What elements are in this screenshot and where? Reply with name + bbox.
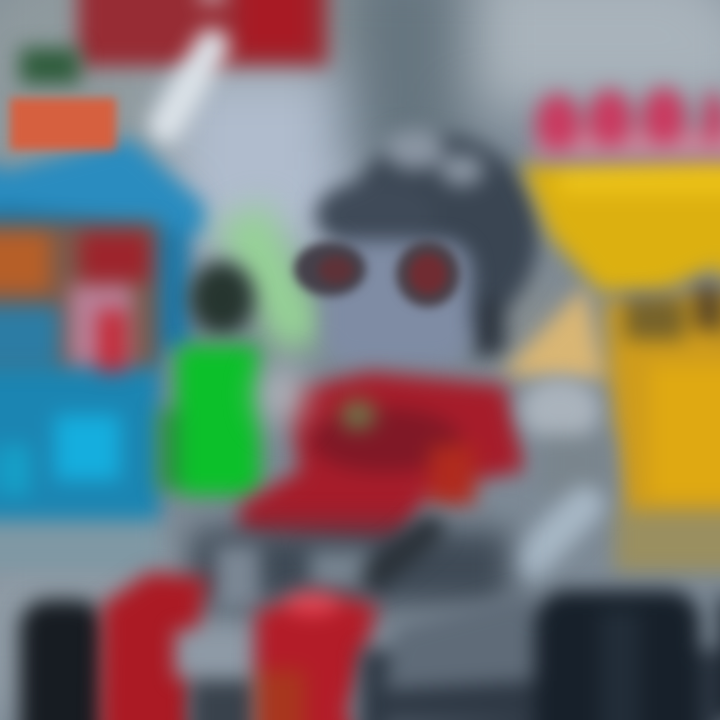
left eye (294, 242, 366, 296)
blue robot window (0, 222, 158, 372)
right eye (396, 241, 460, 307)
head helmet (315, 130, 538, 355)
yellow robot top (522, 158, 720, 292)
small grey arm at torso (258, 365, 306, 425)
red block at top (78, 0, 328, 66)
dark neck between bottle and head (190, 262, 254, 334)
red robot torso (240, 372, 525, 550)
orange label on blue robot (10, 98, 116, 150)
grey centre block between wheels (175, 630, 255, 720)
left dark wheel (20, 600, 105, 720)
light green tube (240, 215, 305, 345)
yellow robot lower body (500, 285, 720, 572)
left red wheel (100, 572, 208, 720)
grey parts in chassis (215, 530, 430, 610)
blue robot body (0, 138, 205, 570)
face (322, 240, 472, 365)
green bottle (158, 345, 260, 495)
grey arm and hand (520, 378, 610, 560)
grey robot head (294, 130, 538, 365)
centre red wheel (255, 590, 378, 720)
dark green block (20, 48, 80, 84)
white stick antenna (166, 46, 212, 126)
pink studs (535, 88, 720, 158)
right dark base (360, 590, 720, 720)
dark lower chassis (190, 530, 510, 605)
